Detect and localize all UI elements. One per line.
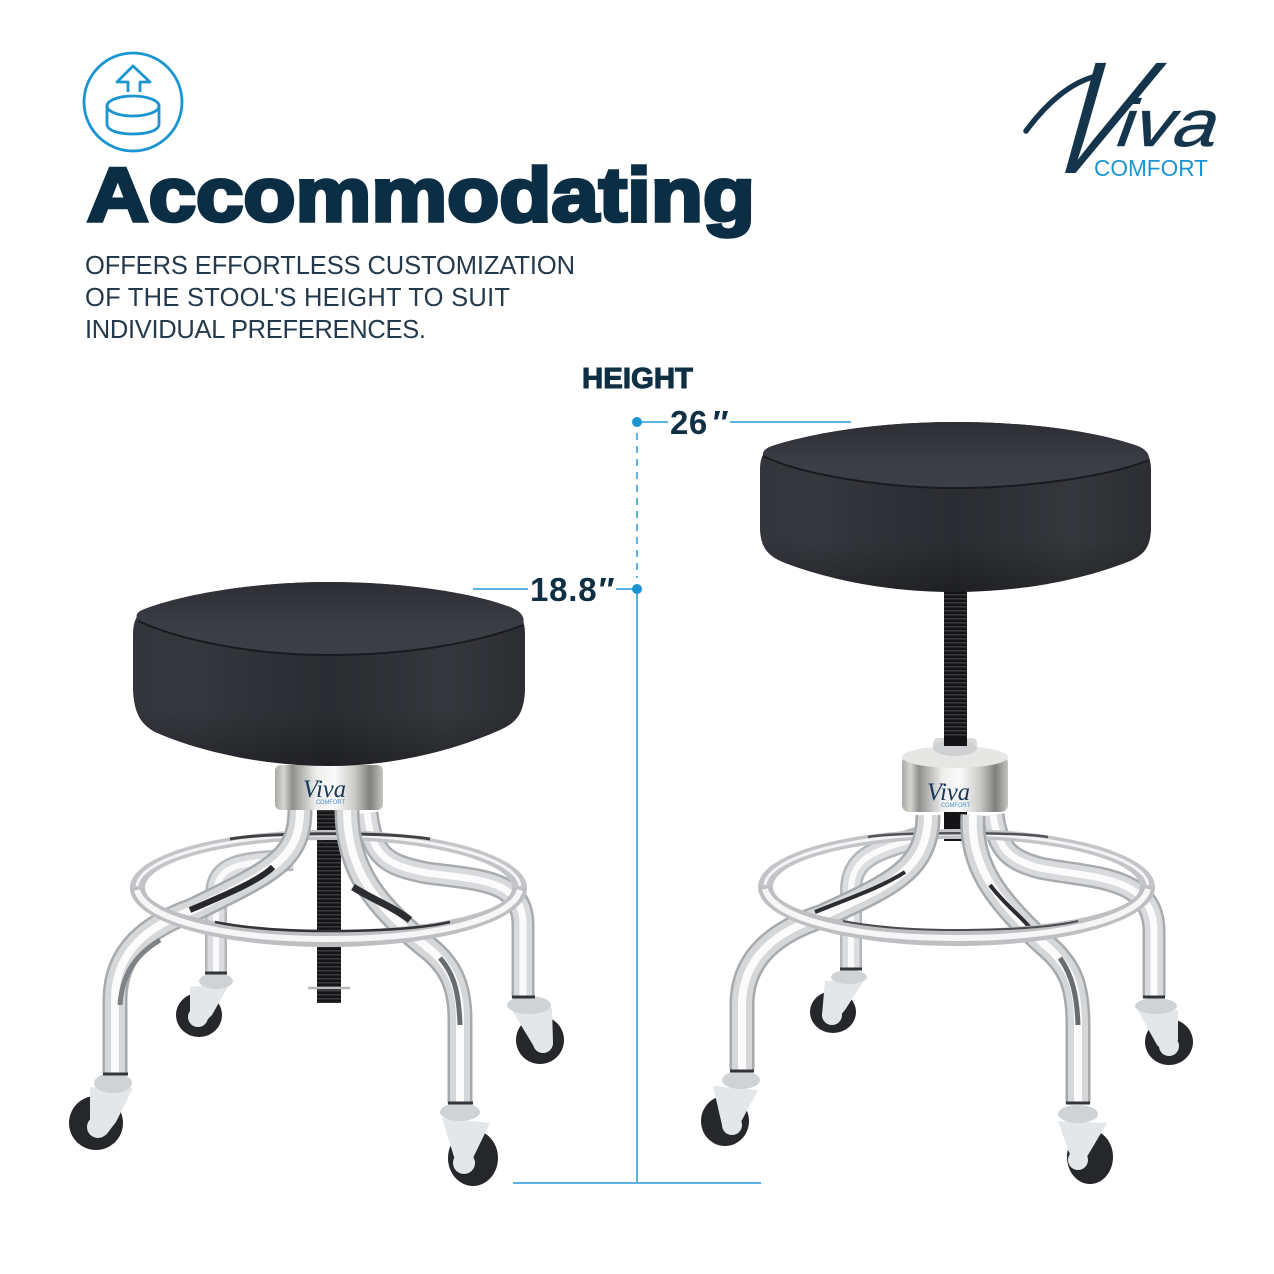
title: Accommodating [87,153,755,238]
front legs [115,810,460,1103]
icon: seat height arrow in circle [84,53,182,151]
threaded screw [944,590,967,841]
label: 18.8 inch: ″ [597,571,614,608]
stool: lowered, left [69,582,564,1186]
label: 18.8 inch: 18.8 [530,571,597,608]
collar [902,738,1008,812]
text block: description: INDIVIDUAL PREFERENCES. [85,316,426,344]
threaded screw [308,810,350,1003]
seat [133,582,525,766]
text block: description: OFFERS EFFORTLESS CUSTOMIZATION [85,252,575,280]
text block: description [85,252,575,344]
collar logo: Viva [303,776,346,803]
collar: Viva [927,779,970,806]
casters [69,973,564,1186]
collar [275,765,383,810]
label: 26 inch: 26 [670,404,708,441]
footrest ring, front [758,887,1155,946]
label: height heading: HEIGHT [582,363,693,395]
footrest ring, front [130,888,527,947]
footrest ring, back [130,830,527,888]
height dimension lines [473,417,851,1183]
logo: Viva Comfort: iva [1107,87,1234,161]
back legs [216,813,523,997]
logo: Viva Comfort: COMFORT [1094,155,1208,181]
front legs [742,815,1078,1103]
collar: COMFORT [941,803,970,809]
label: 26 inch: ″ [711,404,728,441]
collar logo: COMFORT [316,800,345,806]
stool: raised, right [701,422,1193,1184]
text block: description: OF THE STOOL'S HEIGHT TO SUIT [85,284,510,312]
footrest ring, back [758,829,1155,887]
back legs [851,815,1154,997]
logo: Viva Comfort: V [1015,28,1187,207]
casters [701,969,1193,1184]
seat [760,422,1151,592]
